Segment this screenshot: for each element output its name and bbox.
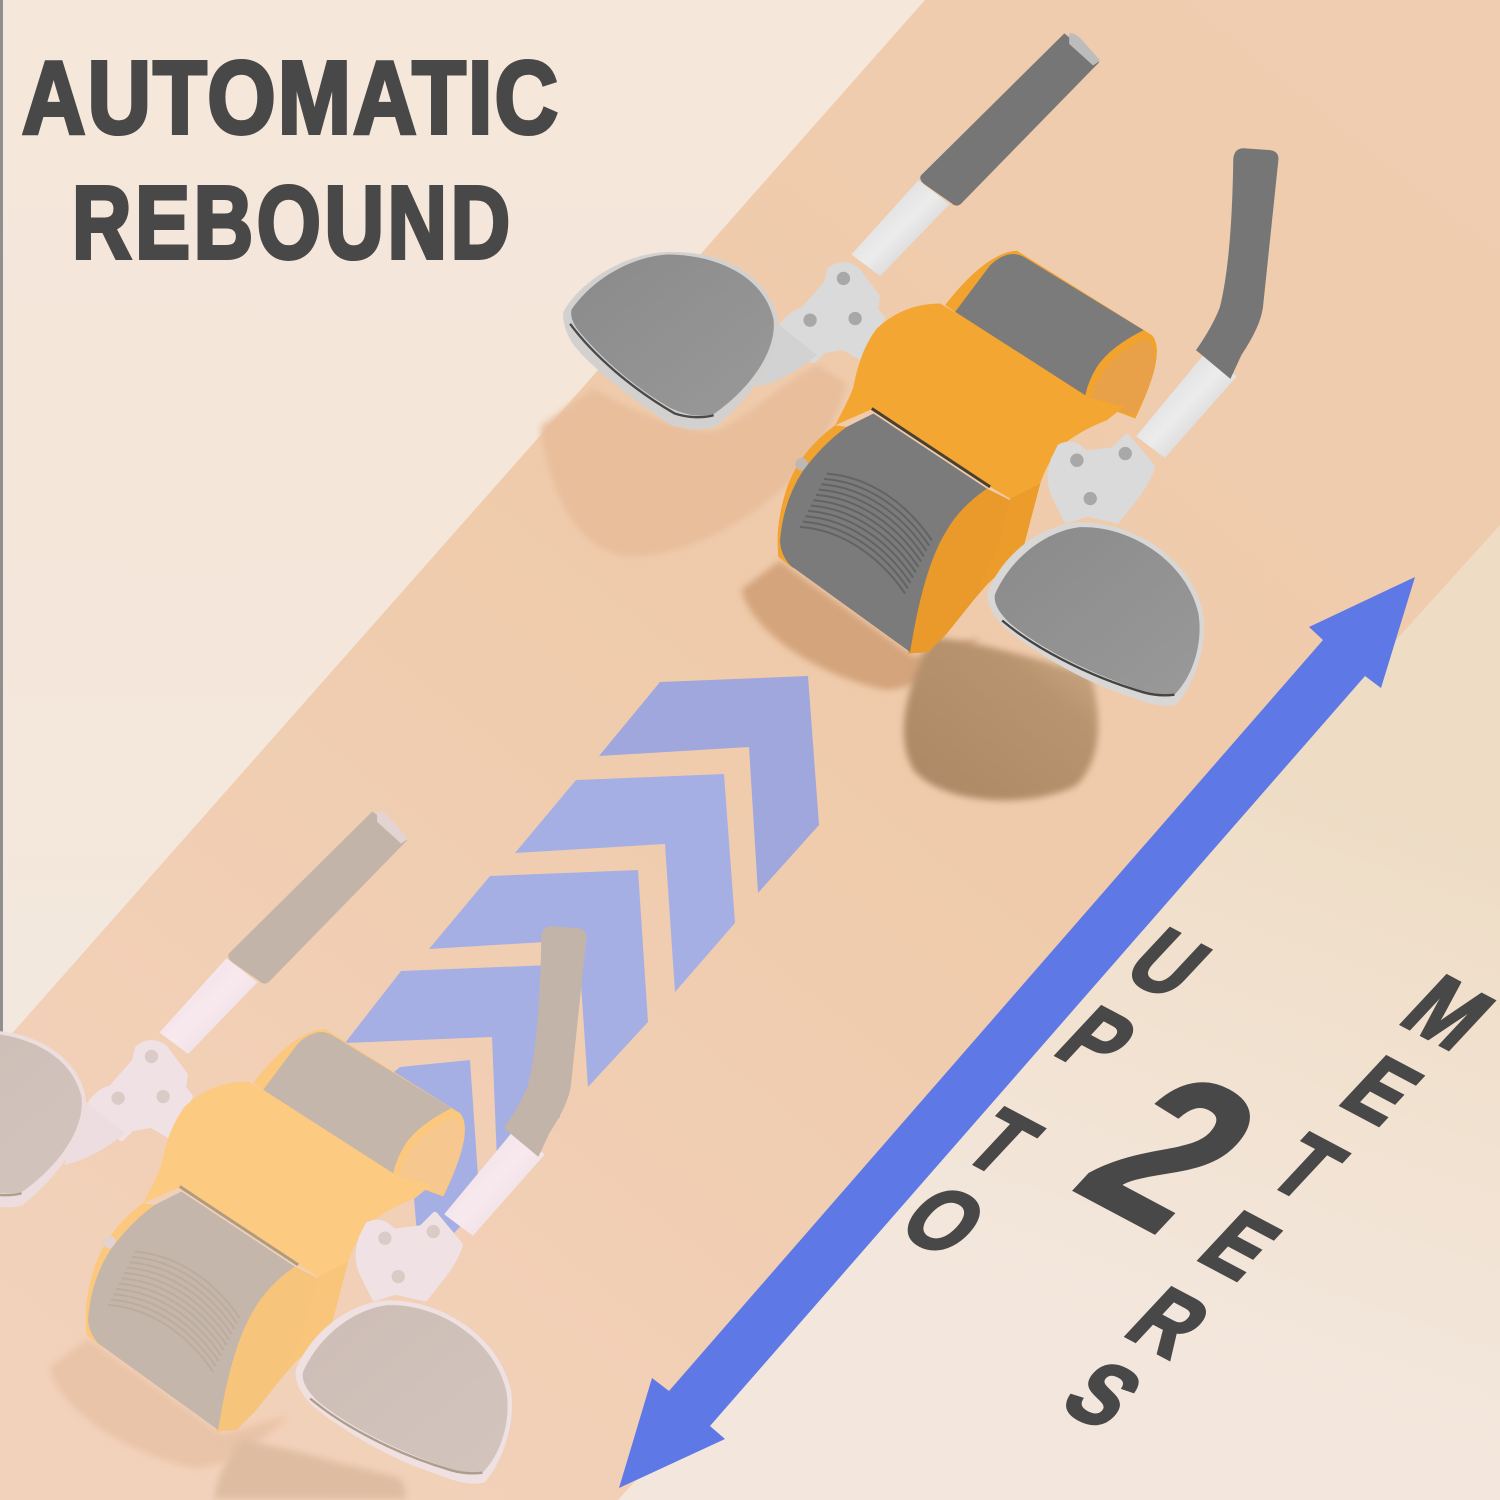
shadows under faded roller (49, 1339, 406, 1499)
right handle grip (1196, 148, 1278, 379)
label: up to: U (1106, 911, 1229, 1016)
label: meters: S (1043, 1343, 1162, 1446)
title line 1: AUTOMATIC (22, 40, 560, 156)
label: up to: T (944, 1092, 1059, 1193)
left handle grip (920, 33, 1100, 206)
lower wheel side (893, 487, 1024, 654)
chevron 5 (300, 1060, 480, 1270)
orange frame (835, 303, 1124, 547)
label: meters: T (1249, 1117, 1364, 1218)
left handle tube (851, 180, 950, 276)
right joint (1051, 437, 1152, 520)
label: meters: E (1180, 1194, 1299, 1297)
label: up to: P (1037, 989, 1156, 1092)
ab roller, rebound position (563, 33, 1278, 706)
upper wheel tread (955, 254, 1144, 395)
double-headed distance arrow (619, 577, 1415, 1488)
lower wheel tread (780, 414, 987, 652)
motion chevrons (300, 676, 819, 1270)
chevron 4 (345, 965, 560, 1185)
roller mechanism (757, 251, 1157, 654)
left pad shadow (540, 365, 847, 556)
faded ab roller, start position (0, 811, 586, 1484)
wheel ridges (800, 474, 932, 594)
right pad shadow (904, 637, 1098, 800)
lower wheel rim (778, 425, 847, 569)
chevron 2 (515, 774, 735, 992)
axle pin (795, 458, 808, 471)
chevron 1 (599, 676, 819, 893)
shadows under upper roller (540, 365, 1098, 800)
faded pad shadow (214, 1439, 406, 1499)
chevron 3 (429, 870, 648, 1087)
right joint bolts (1070, 447, 1132, 505)
upper wheel rim (945, 251, 1157, 419)
left joint bolts (803, 272, 862, 327)
title (22, 40, 560, 280)
title line 2: REBOUND (72, 165, 514, 280)
right knee pad (988, 522, 1204, 706)
right handle tube (1136, 353, 1237, 458)
label: 2: 2 (1034, 1030, 1309, 1274)
label: meters: E (1322, 1039, 1441, 1142)
frame lower side (977, 484, 1040, 594)
left knee pad (563, 252, 778, 429)
label: meters: R (1107, 1270, 1230, 1375)
frame slit (872, 409, 990, 487)
label: up to: O (880, 1167, 1007, 1274)
wheel shadow (741, 561, 981, 690)
upper wheel side (1090, 338, 1155, 415)
label: up to (880, 911, 1229, 1274)
left arm to pad (757, 320, 817, 387)
faded wheel shadow (49, 1339, 289, 1468)
label: meters (1043, 958, 1500, 1446)
left joint (782, 265, 882, 360)
